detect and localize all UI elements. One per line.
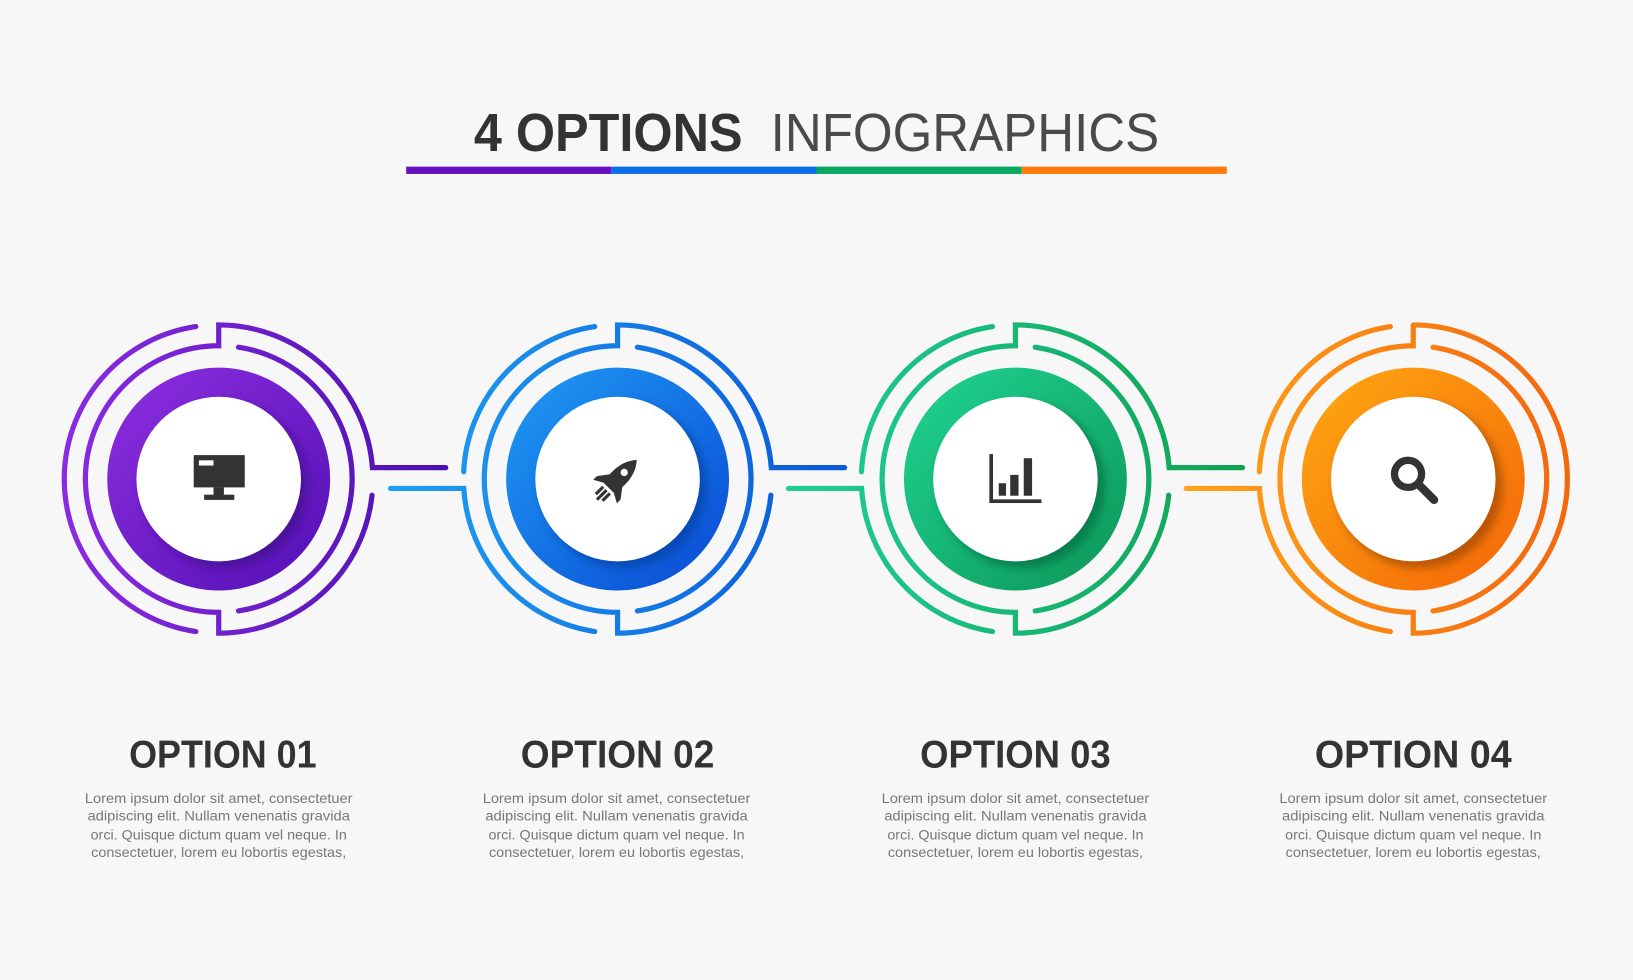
option 2 text: adipiscing elit. Nullam venenatis gravida — [485, 809, 748, 824]
option 4 text: Lorem ipsum dolor sit amet, consectetuer — [1279, 791, 1548, 806]
option 3 text: Lorem ipsum dolor sit amet, consectetuer — [882, 791, 1150, 806]
option 2 text: OPTION 02 — [521, 734, 714, 777]
title underline bar — [406, 167, 1227, 174]
option 1 text: orci. Quisque dictum quam vel neque. In — [91, 827, 347, 842]
option 4 text: adipiscing elit. Nullam venenatis gravida — [1282, 809, 1545, 824]
title — [474, 103, 1159, 163]
option 1 text: consectetuer, lorem eu lobortis egestas, — [91, 845, 346, 860]
icon: magnifier — [1395, 460, 1434, 500]
icon: monitor — [194, 455, 245, 500]
title: INFOGRAPHICS — [771, 103, 1159, 163]
step 3: green circle — [788, 325, 1242, 633]
step 4: orange circle — [1186, 325, 1567, 633]
option 3 text: consectetuer, lorem eu lobortis egestas, — [888, 845, 1143, 860]
icon: bar chart — [989, 454, 1041, 503]
step 2: blue circle — [391, 325, 845, 633]
option 2 text — [483, 734, 751, 860]
option 4 text: OPTION 04 — [1315, 734, 1512, 777]
option 3 text: adipiscing elit. Nullam venenatis gravida — [884, 809, 1147, 824]
option 4 text: orci. Quisque dictum quam vel neque. In — [1285, 827, 1541, 842]
option 4 text — [1279, 734, 1548, 860]
option 2 text: Lorem ipsum dolor sit amet, consectetuer — [483, 791, 751, 806]
option 1 text — [85, 734, 353, 860]
option 2 text: consectetuer, lorem eu lobortis egestas, — [489, 845, 744, 860]
option 2 text: orci. Quisque dictum quam vel neque. In — [488, 827, 745, 842]
option 3 text — [882, 734, 1150, 860]
step 1: purple circle — [64, 325, 446, 633]
option 4 text: consectetuer, lorem eu lobortis egestas, — [1286, 845, 1541, 860]
option 1 text: Lorem ipsum dolor sit amet, consectetuer — [85, 791, 353, 806]
option 3 text: OPTION 03 — [920, 734, 1111, 777]
option 1 text: adipiscing elit. Nullam venenatis gravida — [87, 809, 350, 824]
icon: rocket — [585, 448, 649, 511]
title: 4 OPTIONS — [474, 103, 743, 163]
option 1 text: OPTION 01 — [129, 734, 317, 777]
option 3 text: orci. Quisque dictum quam vel neque. In — [887, 827, 1144, 842]
